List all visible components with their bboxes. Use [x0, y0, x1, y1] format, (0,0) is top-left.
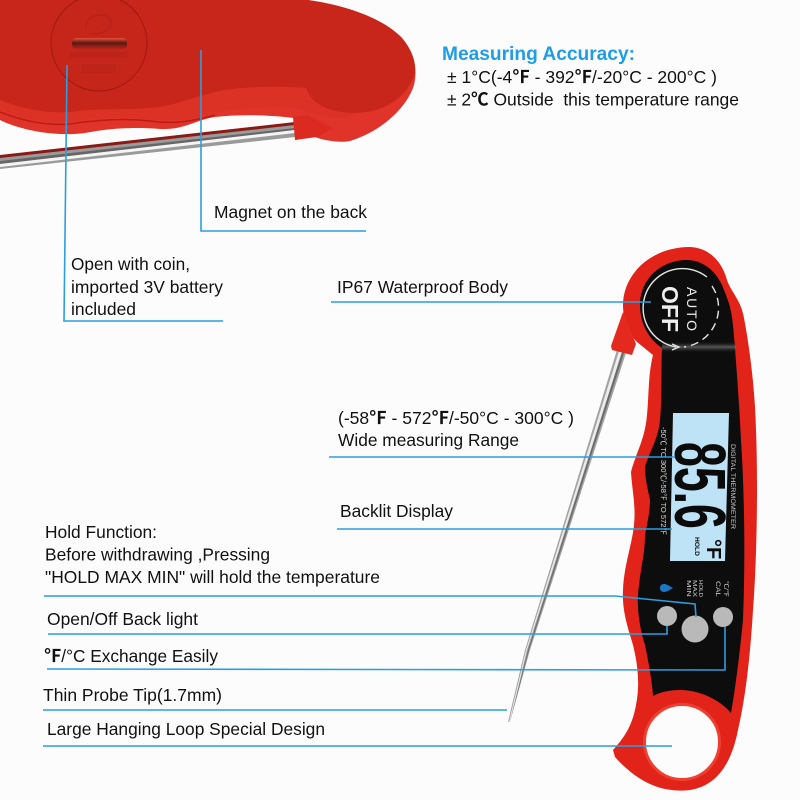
text: accuracy range: ± 1°C(-4℉ - 392℉/-20°C - 200°C ) — [447, 64, 717, 89]
label: hold function: Hold Function: — [45, 522, 157, 542]
back view probe — [0, 122, 295, 169]
probe hinge — [293, 115, 333, 140]
back view handle silhouette — [0, 0, 416, 142]
range print: -50℃ TO 300℃/-58℉ TO 572℉ — [659, 427, 668, 535]
hanging loop hole — [644, 704, 720, 780]
thermometer front view: HOLD — [697, 580, 703, 597]
label: magnet: Magnet on the back — [214, 202, 367, 222]
groove line — [0, 112, 215, 124]
label: battery — [71, 254, 223, 319]
icon: backlight drop — [660, 584, 673, 592]
lcd screen — [670, 413, 729, 561]
red body — [613, 247, 757, 791]
back view handle face — [0, 0, 415, 113]
auto off ring — [643, 269, 719, 350]
cal print: CAL — [714, 581, 720, 598]
hold indicator: HOLD — [693, 537, 700, 556]
label: back light: Open/Off Back light — [47, 609, 198, 629]
coin slot — [72, 38, 127, 49]
off label: OFF — [657, 286, 683, 332]
label: unit exchange: ℉/°C Exchange Easily — [44, 643, 218, 668]
back view handle ridge — [0, 85, 355, 122]
unit button — [713, 607, 733, 627]
label: hanging loop: Large Hanging Loop Special Design — [47, 719, 325, 739]
label: battery: included — [71, 299, 136, 319]
label: hold function: "HOLD MAX MIN" will hold the temperature — [45, 567, 380, 587]
thermometer front view — [508, 247, 757, 791]
hold button — [682, 616, 708, 642]
degree unit: °F — [702, 539, 724, 559]
label: measuring range — [338, 405, 574, 450]
thermometer front view: ℃/℉ — [722, 581, 729, 597]
label: hold function: Before withdrawing ,Pressing — [45, 544, 270, 564]
label: measuring range: (-58℉ - 572℉/-50°C - 300°C ) — [338, 405, 574, 430]
label: battery: imported 3V battery — [71, 277, 223, 297]
thermometer back view — [0, 0, 416, 169]
leader lines — [43, 50, 725, 746]
label: hold function — [45, 522, 380, 587]
label: measuring range: Wide measuring Range — [338, 430, 519, 450]
label: battery: Open with coin, — [71, 254, 190, 274]
thermometer front view: MAX — [691, 580, 697, 597]
heading: measuring accuracy: Measuring Accuracy: — [442, 44, 635, 65]
hold max min print: MIN — [685, 580, 691, 597]
label: backlit display: Backlit Display — [340, 501, 453, 521]
hinge — [611, 312, 636, 355]
text: accuracy outside range: ± 2℃ Outside this temperature range — [447, 86, 739, 112]
auto label: AUTO — [684, 287, 700, 331]
backlight button — [657, 606, 677, 626]
front view probe — [508, 350, 626, 722]
battery coin cover — [51, 0, 147, 91]
lcd digits: 85.6 — [659, 442, 740, 529]
label: waterproof: IP67 Waterproof Body — [337, 277, 508, 297]
label: probe tip: Thin Probe Tip(1.7mm) — [43, 685, 222, 705]
black face panel — [638, 260, 744, 713]
digital thermometer print: DIGITAL THERMOMETER — [729, 444, 736, 529]
